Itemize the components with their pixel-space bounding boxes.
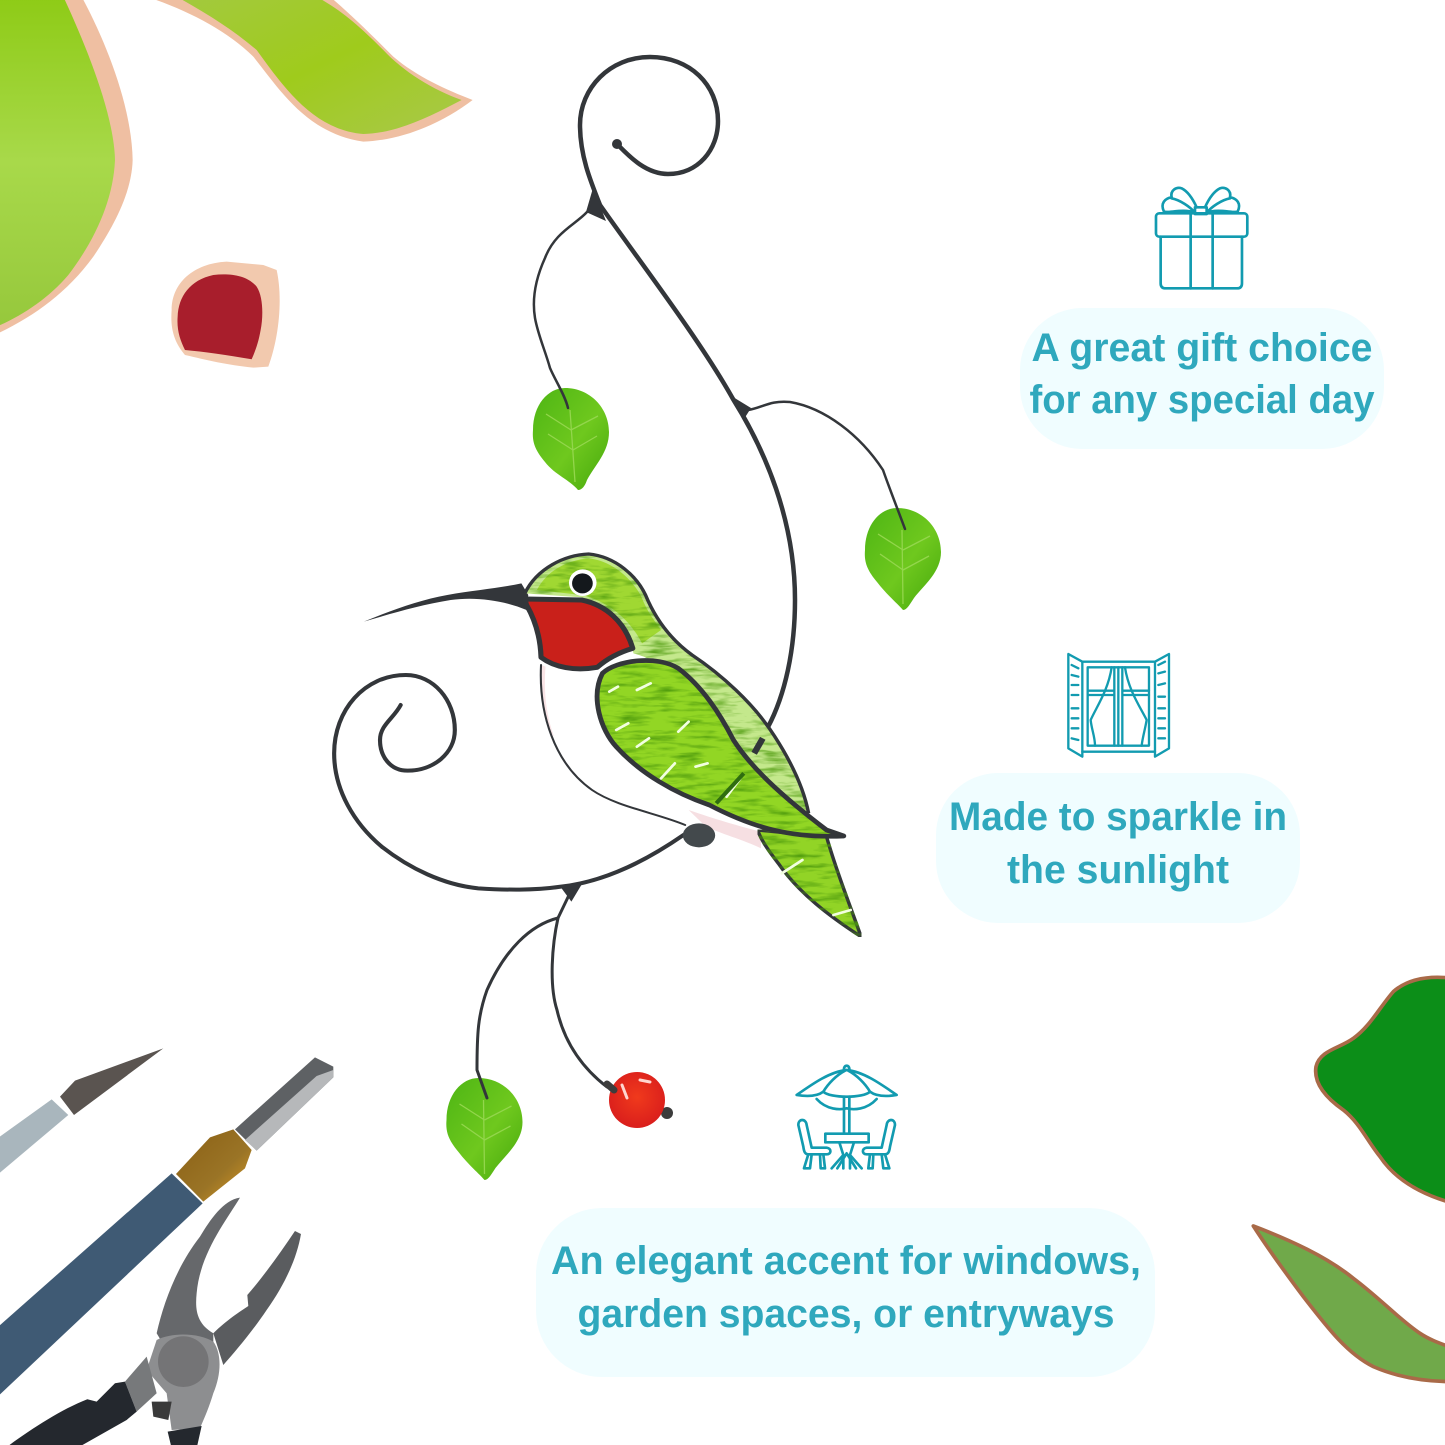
lime glass leaf strip xyxy=(147,0,473,142)
glass cutter handle xyxy=(0,1173,203,1396)
craft knife handle xyxy=(0,1099,68,1174)
callout: sunlight xyxy=(936,773,1300,923)
wing outline xyxy=(597,660,844,836)
olive glass leaf xyxy=(1253,1226,1445,1382)
lower wires xyxy=(477,893,570,1098)
head green tint xyxy=(537,558,661,643)
hummingbird suncatcher xyxy=(334,57,941,1180)
red throat glass xyxy=(525,599,633,669)
glass cutter brass collar xyxy=(176,1129,252,1202)
callout: sunlight: Made to sparkle in xyxy=(949,795,1287,839)
glass leaf right xyxy=(865,508,941,610)
back outline xyxy=(525,554,809,813)
right wire joint xyxy=(733,397,751,419)
back and head glass xyxy=(525,554,809,813)
undertail pink patch xyxy=(689,810,761,848)
wing highlights xyxy=(609,683,851,915)
eye xyxy=(569,569,597,596)
pliers head xyxy=(147,1334,220,1430)
wire joint xyxy=(586,188,606,221)
callout: gift xyxy=(1020,308,1384,449)
pliers lower jaw xyxy=(213,1231,301,1365)
belly line xyxy=(541,665,685,825)
callout: accent: garden spaces, or entryways xyxy=(578,1292,1114,1336)
branch fork xyxy=(560,884,582,902)
hanging wire with top curl xyxy=(580,57,795,727)
callout: gift: for any special day xyxy=(1030,378,1375,422)
curl end blob xyxy=(612,139,622,149)
icon: window with shutters xyxy=(1068,654,1169,757)
back dark strip xyxy=(754,738,763,753)
wing dark patch xyxy=(716,773,744,803)
perch bead xyxy=(683,823,715,847)
decoration: glass leaves bottom right xyxy=(1253,977,1445,1382)
branch spiral xyxy=(334,675,683,890)
red bead wire xyxy=(552,918,607,1087)
red bead xyxy=(607,1072,673,1128)
glass leaf bottom xyxy=(446,1078,522,1180)
belly tint xyxy=(541,665,554,737)
glass leaf left xyxy=(533,388,609,490)
pliers handles xyxy=(5,1382,137,1445)
dark green glass leaf xyxy=(1316,977,1445,1203)
right hanging wire xyxy=(748,402,905,529)
tail glass xyxy=(758,830,861,937)
icon: gift box xyxy=(1156,188,1247,288)
craft knife blade xyxy=(60,1048,163,1115)
wing glass xyxy=(597,660,844,836)
callout: accent: An elegant accent for windows, xyxy=(551,1239,1141,1283)
bird drawn in zoomed coordinates xyxy=(334,554,861,937)
decoration: glass leaves and red piece top left xyxy=(0,0,473,368)
pliers spring xyxy=(152,1402,172,1420)
beak xyxy=(364,583,528,622)
glass cutter head xyxy=(235,1057,333,1151)
red glass piece xyxy=(171,262,280,368)
large lime glass leaf xyxy=(0,0,133,334)
decoration: craft tools bottom left xyxy=(0,1048,333,1445)
icon: patio umbrella and table xyxy=(797,1066,897,1168)
callout: gift: A great gift choice xyxy=(1032,326,1372,370)
pliers upper jaw xyxy=(157,1198,240,1350)
callout: sunlight: the sunlight xyxy=(1007,848,1229,892)
left hanging wire xyxy=(534,212,587,408)
callout: accent xyxy=(536,1208,1155,1377)
